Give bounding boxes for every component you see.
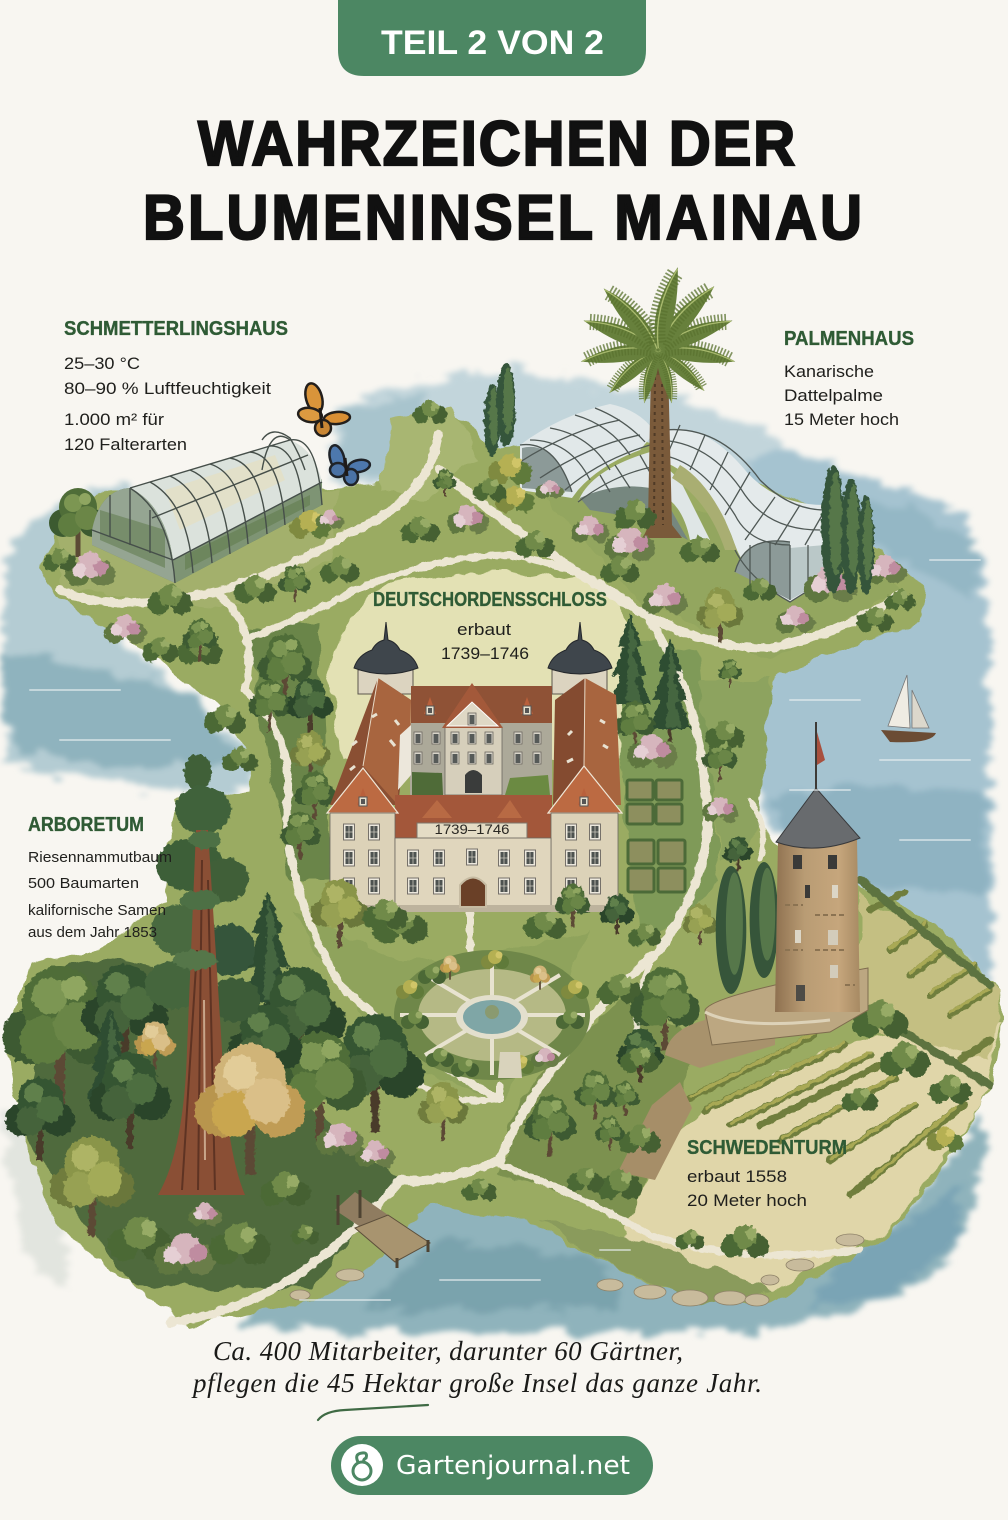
castle: Deutschordensschloss bbox=[327, 622, 622, 912]
castle towers bbox=[354, 622, 612, 694]
label: Arboretum: ARBORETUM bbox=[28, 814, 144, 836]
palm tree bbox=[580, 265, 736, 538]
label: Schwedenturm: erbaut 1558 bbox=[687, 1167, 787, 1186]
wooden dock bbox=[335, 1190, 430, 1268]
label: Arboretum: 500 Baumarten bbox=[28, 875, 139, 892]
label: Palmenhaus bbox=[784, 328, 914, 429]
handwritten note bbox=[191, 1336, 762, 1420]
shrubs in front of the castle bbox=[312, 879, 633, 945]
parterre gardens bbox=[627, 780, 685, 892]
top tab: Teil 2 von 2 bbox=[338, 0, 646, 76]
label: Schmetterlingshaus: 25–30 °C bbox=[64, 354, 140, 373]
fountain garden bbox=[394, 950, 590, 1080]
castle date plaque: 1739–1746 bbox=[434, 821, 510, 837]
label: Deutschordensschloss: 1739–1746 bbox=[441, 644, 529, 663]
label: Deutschordensschloss: DEUTSCHORDENSSCHLOSS bbox=[373, 589, 607, 611]
castle front roofs bbox=[327, 766, 622, 838]
trees and shrubs: northern gardens bbox=[43, 363, 915, 772]
water highlights bbox=[30, 560, 980, 1300]
label: Arboretum: kalifornische Samen bbox=[28, 902, 166, 919]
top tab: Teil 2 von 2: TEIL 2 VON 2 bbox=[381, 24, 604, 62]
footer badge: Gartenjournal.net bbox=[331, 1436, 653, 1495]
island land mass bbox=[8, 414, 1001, 1325]
arboretum forest with giant sequoia bbox=[2, 754, 424, 1275]
title: WAHRZEICHEN DER bbox=[198, 108, 795, 179]
shoreline rocks bbox=[290, 1234, 864, 1306]
lawns bbox=[20, 410, 1000, 1305]
island map illustration bbox=[0, 265, 1001, 1333]
label: Schmetterlingshaus: SCHMETTERLINGSHAUS bbox=[64, 318, 288, 340]
giant sequoia bbox=[145, 754, 260, 1195]
icon: garden logo bbox=[353, 1453, 371, 1480]
label: Deutschordensschloss bbox=[373, 589, 607, 663]
trees: around the castle bbox=[248, 613, 752, 1004]
label: Palmenhaus: PALMENHAUS bbox=[784, 328, 914, 350]
title bbox=[143, 108, 862, 253]
castle rear wing bbox=[410, 683, 552, 795]
label: Palmenhaus: Kanarische bbox=[784, 362, 874, 381]
castle side roofs bbox=[330, 678, 621, 805]
trees: southern park bbox=[418, 1046, 769, 1257]
title: BLUMENINSEL MAINAU bbox=[143, 182, 862, 253]
label: Arboretum bbox=[28, 814, 172, 941]
butterfly: orange bbox=[297, 381, 350, 436]
Schwedenturm tower bbox=[617, 722, 971, 1180]
label: Schmetterlingshaus bbox=[64, 318, 288, 454]
label: Schmetterlingshaus: 120 Falterarten bbox=[64, 435, 187, 454]
label: Palmenhaus: 15 Meter hoch bbox=[784, 410, 899, 429]
cliff bbox=[618, 1082, 692, 1180]
water: lake around the island bbox=[0, 370, 992, 1333]
greenhouse: Schmetterlingshaus bbox=[49, 432, 322, 583]
label: Palmenhaus: Dattelpalme bbox=[784, 386, 883, 405]
castle walls bbox=[330, 813, 618, 912]
label: Schmetterlingshaus: 1.000 m² für bbox=[64, 410, 164, 429]
label: Arboretum: aus dem Jahr 1853 bbox=[28, 924, 157, 941]
label: Schwedenturm: SCHWEDENTURM bbox=[687, 1137, 847, 1159]
footer badge: Gartenjournal.net: Gartenjournal.net bbox=[396, 1451, 630, 1481]
handwritten note: pflegen die 45 Hektar große Insel das ganze Jahr. bbox=[191, 1368, 762, 1398]
garden paths bbox=[60, 435, 900, 1322]
label: Schwedenturm: 20 Meter hoch bbox=[687, 1191, 807, 1210]
label: Deutschordensschloss: erbaut bbox=[457, 620, 511, 639]
greenhouse: Palmenhaus bbox=[520, 404, 825, 602]
label: Schwedenturm bbox=[687, 1137, 847, 1210]
label: Arboretum: Riesennammutbaum bbox=[28, 849, 172, 866]
handwritten note: Ca. 400 Mitarbeiter, darunter 60 Gärtner, bbox=[213, 1336, 683, 1366]
label: Schmetterlingshaus: 80–90 % Luftfeuchtigkeit bbox=[64, 379, 271, 398]
vineyard bbox=[690, 880, 990, 1195]
butterfly: blue bbox=[327, 444, 371, 485]
sailboat bbox=[881, 675, 936, 742]
